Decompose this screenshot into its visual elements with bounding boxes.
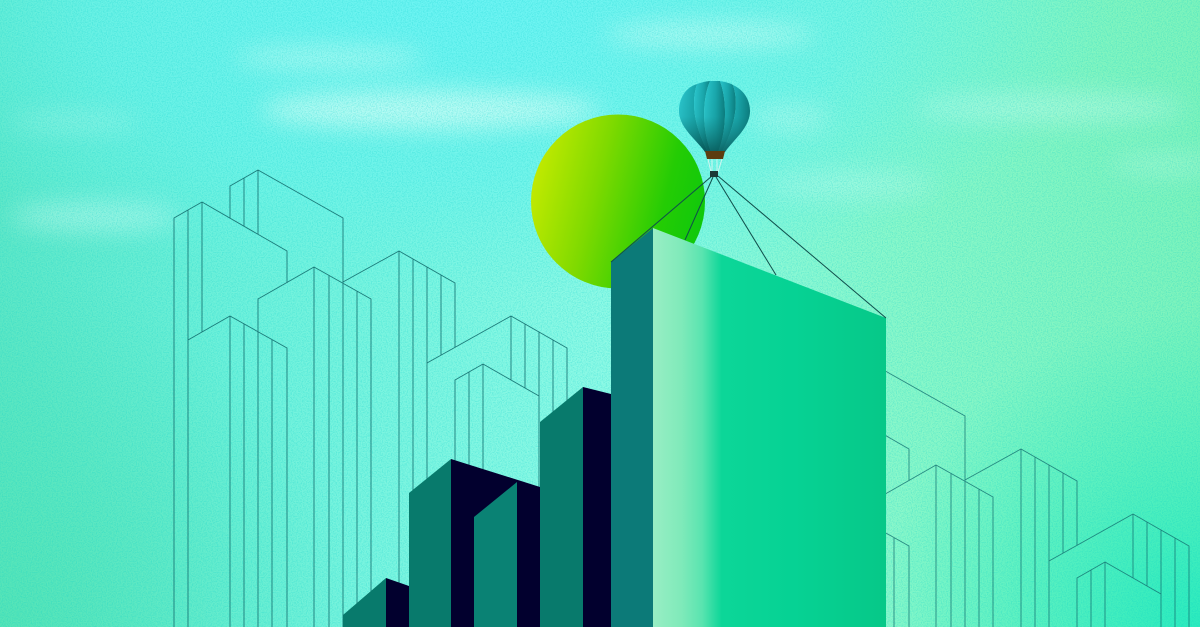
icon: hot air balloon (679, 81, 750, 177)
wireframe buildings right (796, 368, 1189, 627)
clouds (10, 23, 1200, 232)
small dark building (343, 578, 409, 627)
middle dark building front (474, 482, 517, 627)
middle dark building back (409, 459, 540, 627)
sun (531, 114, 705, 288)
wireframe buildings left (174, 170, 567, 627)
balloon tether ropes (611, 176, 886, 318)
tall dark building (540, 387, 611, 627)
large foreground building (611, 228, 886, 627)
